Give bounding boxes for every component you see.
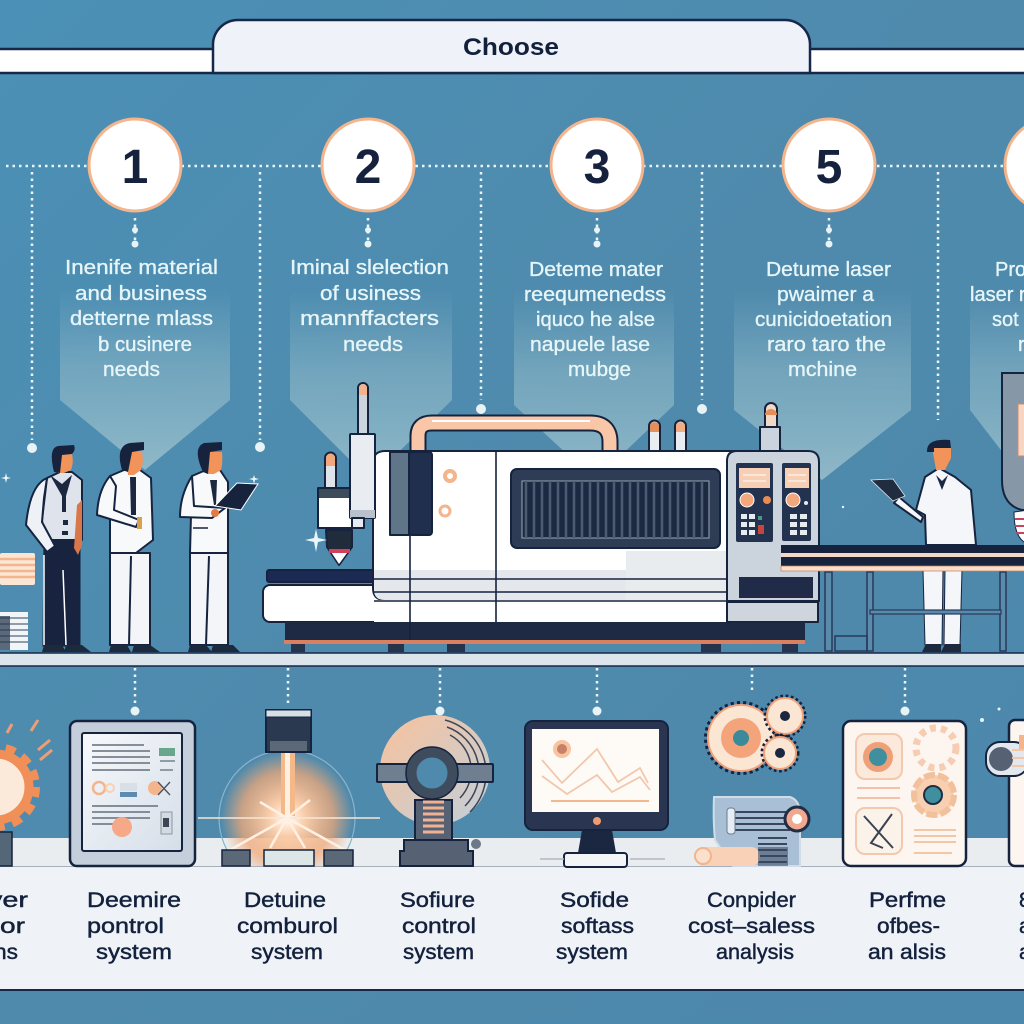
title: Choose — [463, 34, 559, 61]
person 1 — [26, 445, 91, 652]
laser machine — [263, 383, 819, 652]
connector end dots — [27, 227, 832, 453]
label: software system — [556, 889, 634, 964]
label: software system: Sofide — [560, 889, 629, 912]
step 6 text partial: laser r — [970, 284, 1024, 306]
label: determine control system: system — [96, 941, 172, 964]
step number 3 — [551, 119, 643, 211]
conveyor table — [781, 440, 1024, 652]
step 5 text: raro taro the — [767, 334, 886, 356]
step 2 text: Iminal slelection — [290, 257, 449, 279]
bottom connector lines — [135, 668, 905, 706]
sparkles — [1, 473, 844, 552]
label: perform analysis: Perfme — [869, 889, 946, 912]
door panel — [390, 452, 432, 535]
step 5 text: mchine — [788, 359, 857, 381]
label: determine control system: Deemire — [87, 889, 181, 912]
step 3 text: iquco he alse — [536, 309, 655, 331]
label: detune combustion system: comburol — [237, 915, 338, 938]
feet — [291, 644, 798, 652]
small gear marks — [440, 471, 455, 516]
label: perform analysis: an alsis — [868, 941, 946, 964]
bottom connector dots — [130, 706, 1000, 722]
step 1 text: detterne mlass — [70, 308, 213, 330]
lower label panel — [0, 838, 1024, 990]
step panels backdrop — [60, 290, 1024, 480]
step 5 text: cunicidoetation — [755, 309, 892, 331]
step 3 text — [524, 259, 666, 381]
label: software control system: Sofiure — [400, 889, 475, 912]
label: perform analysis — [868, 889, 946, 964]
step number 2 — [322, 119, 414, 211]
label: determine control system — [87, 889, 181, 964]
label: software system: system — [556, 941, 628, 964]
underframe — [285, 622, 805, 640]
label: left partial: or — [0, 915, 25, 938]
step 2 text: of usiness — [320, 283, 421, 305]
label: cost analysis: cost–saless — [688, 915, 815, 938]
step number 5 — [783, 119, 875, 211]
floor strip — [0, 653, 1024, 666]
label: perform analysis: ofbes- — [877, 915, 940, 938]
top tubes — [649, 403, 780, 451]
icon: analysis card — [843, 721, 966, 866]
orange strip — [284, 640, 805, 644]
operator — [871, 440, 976, 652]
step 2 text: mannffacters — [300, 308, 439, 330]
label: right partial — [1019, 889, 1024, 964]
step 1 text: Inenife material — [65, 257, 218, 279]
step number 6 partial — [1005, 119, 1024, 211]
icon: laser beam — [198, 709, 380, 867]
vent window — [511, 469, 720, 548]
tablet — [215, 483, 258, 510]
step 2 text — [290, 257, 449, 356]
step number 1 — [89, 119, 181, 211]
step 1 text: and business — [75, 283, 207, 305]
laser head — [318, 383, 375, 565]
step 5 text — [755, 259, 892, 381]
step 3 text: mubge — [568, 359, 631, 381]
label: software control system — [400, 889, 476, 964]
icon: power gear partial — [0, 720, 52, 866]
label: cost analysis — [688, 889, 815, 964]
step number 1: 1 — [122, 141, 148, 194]
person 3 — [180, 442, 258, 652]
step 3 text: napuele lase — [530, 334, 650, 356]
icon: document — [70, 721, 195, 866]
icon: monitor — [525, 721, 668, 867]
step 1 text — [65, 257, 218, 381]
label: detune combustion system: Detuine — [244, 889, 326, 912]
step 1 text: needs — [103, 359, 160, 381]
icon: cost roll — [695, 797, 809, 866]
label: software control system: control — [402, 915, 476, 938]
label: software system: softass — [561, 915, 634, 938]
label: software control system: system — [403, 941, 474, 964]
step 5 text: Detume laser — [766, 259, 891, 281]
step 5 text: pwaimer a — [777, 284, 875, 306]
title tab — [213, 20, 810, 73]
icon: spool — [377, 715, 493, 866]
step 1 text: b cusinere — [98, 334, 192, 356]
step 3 text: reequmenedss — [524, 284, 666, 306]
label: left partial — [0, 889, 28, 964]
control panel — [727, 451, 819, 640]
label: detune combustion system: system — [251, 941, 323, 964]
step number 3: 3 — [584, 141, 610, 194]
bed — [267, 570, 379, 582]
step 6 text partial: sot — [992, 309, 1019, 331]
person 2 — [97, 442, 160, 652]
step number 2: 2 — [355, 141, 381, 194]
left stacked materials — [0, 553, 35, 650]
label: cost analysis: analysis — [716, 941, 794, 964]
step 6 text partial — [970, 259, 1024, 356]
label: determine control system: pontrol — [87, 915, 164, 938]
step number 5: 5 — [816, 141, 842, 194]
main body — [373, 451, 740, 600]
right machine partial — [1002, 373, 1024, 542]
label: detune combustion system — [237, 889, 338, 964]
operator tablet — [871, 479, 905, 501]
header band — [0, 20, 1024, 73]
label: cost analysis: Conpider — [707, 889, 796, 912]
dotted connector lines — [6, 166, 1024, 440]
step 2 text: needs — [343, 334, 403, 356]
base deck — [263, 585, 807, 622]
pipe — [418, 421, 610, 452]
icon: gears — [707, 697, 804, 772]
icon: right card partial — [986, 720, 1024, 866]
step 3 text: Deteme mater — [529, 259, 663, 281]
